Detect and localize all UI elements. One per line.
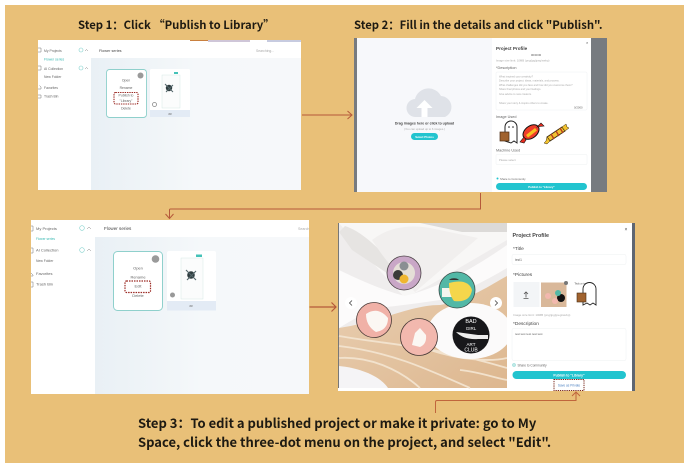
project thumbnail [167,251,216,310]
form: project profile: test test test test test [515,332,543,336]
sidebar menu: Favorites [36,271,52,276]
project card with menu: "Library" [120,99,133,103]
panel: step 2 screenshot [354,38,607,192]
publish button [496,183,587,190]
ghost sticker [505,121,517,143]
project card with menu [106,70,146,118]
select photos button [411,133,438,140]
project card with menu: Open [133,266,143,270]
form: project profile: Machine Used [496,148,520,152]
text: step 3 instructions: Step 3：To edit a published project or make it private: go to My [138,413,537,432]
form: project profile: *Pictures [513,272,533,278]
panel: step 1 screenshot: Searching... [256,49,274,53]
arrow: step 2 to step 3 [166,193,480,218]
project card with menu: Open [122,78,130,82]
photo: enamel pins: CLUB [464,348,478,354]
white cloth folds [339,223,507,298]
project thumbnail: ## [189,304,193,308]
project card with menu: Publish to [119,94,134,98]
sidebar menu [31,226,91,287]
form: project profile [507,223,635,391]
header: Flower series [104,226,132,231]
arrow: step 3 to save as private [436,392,580,413]
save as private link [554,380,584,390]
form: project profile: Please select [499,158,516,162]
striped candy sticker [547,127,565,141]
form: project profile: *Description [496,66,516,70]
panel: edit screenshot: Search [298,227,309,231]
photo: enamel pins [339,223,512,388]
sidebar menu: AI Collection [44,67,63,71]
upload area: Select Photos [415,135,434,139]
carousel button: previous [345,297,357,309]
form: project profile: What inspired your creativity? [499,74,534,78]
form: project profile: *Title [513,246,524,252]
title: step 2: Step 2：Fill in the details and click "Publish". [354,17,603,33]
save as private link: Save as Private [558,384,580,388]
sidebar menu: Favorites [44,86,58,90]
project card with menu: Delete [121,106,131,110]
form: project profile: Image Used [496,115,516,119]
form: project profile: Project Profile [496,46,528,51]
project card with menu [114,252,162,310]
photo: enamel pins: BAD [465,319,477,325]
sidebar menu [38,48,88,98]
sidebar menu: New Folder [44,75,62,79]
sidebar menu: Flower series [36,237,55,241]
form: project profile: 0/2000 [574,106,583,110]
form: project profile: Give advice to new creators. [499,92,532,96]
publish button [512,371,626,379]
form: project profile: *Description [513,321,539,327]
upload area: (You can upload up to 6 images.) [404,127,445,131]
form: project profile: Publish to "Library" [528,185,555,189]
sidebar menu: Trash Bin [44,94,58,98]
form: project profile: Project Profile [512,233,549,239]
sidebar menu: My Projects [36,226,57,231]
form: project profile: Describe your project: ideas, materials, and process. [499,78,560,82]
carousel button: next [490,297,502,309]
form: project profile: Publish to "Library" [553,374,585,378]
form: project profile: test1 [515,258,522,262]
form: project profile: Share to Community [518,364,547,368]
project card with menu: Rename [120,86,133,90]
text: step 3 instructions: Space, click the three-dot menu on the project, and select "Edit". [138,432,551,451]
wooden tray [339,276,507,388]
picture: pins thumbnail [541,281,568,307]
arrow: step 1 to step 2 [302,111,352,119]
picture: ghost sticker [574,282,596,305]
header: Flower series [99,49,122,53]
panel: step 1 screenshot [38,40,301,190]
project thumbnail: ## [168,112,172,116]
panel: project edit screenshot [338,223,635,391]
image used stickers [500,121,569,144]
icon: upload cloud [406,88,451,117]
sidebar menu: AI Collection [36,248,58,252]
icon: upload arrow [416,100,432,117]
project thumbnail [150,69,190,117]
upload area [395,88,454,140]
form: project profile: × [624,227,628,233]
picture: ghost sticker: Trick or treat? [574,282,590,286]
pin: purple [387,256,421,290]
form: project profile: What challenges did you face and how did you overcome them? [499,83,573,87]
form: project profile: 00:00:00 [531,53,542,57]
project card with menu: Rename [130,274,146,280]
picture: upload tile [514,282,540,307]
pin: pink hand [356,302,392,338]
project card with menu: Delete [132,293,145,298]
candy sticker [520,122,542,142]
form: project profile: Share final photos and your feelings. [499,87,541,91]
arrow: edit to preview [310,302,336,312]
panel: edit screenshot [31,220,309,394]
pin: teal bread [439,272,475,308]
sidebar menu: Flower series [44,58,64,62]
photo: enamel pins: ART [467,342,476,347]
upload area: Drag images here or click to upload [395,122,454,126]
title: step 1: Step 1：Click “Publish to Library” [78,17,275,33]
project card with menu: Edit [135,284,142,288]
form: project profile [496,40,589,190]
form: project profile: Share your story & inspire others to create. [499,101,549,105]
pin: pink ok [400,318,438,356]
text: step 3 instructions [138,413,551,451]
sidebar menu: My Projects [44,49,62,53]
white round platform [428,303,512,359]
sidebar menu: Trash Bin [36,282,53,286]
form: project profile: Image size limit: 10MB (png/jpg/jpeg/webp) [513,313,570,317]
sidebar menu: New Folder [36,259,54,263]
form: project profile: Share to Community [500,177,526,181]
pin: black [452,316,490,354]
form: project profile: Image size limit: 10MB (png/jpg/jpeg/webp) [496,58,550,62]
photo: enamel pins: GIRL [466,326,477,331]
form: project profile: × [586,40,589,45]
